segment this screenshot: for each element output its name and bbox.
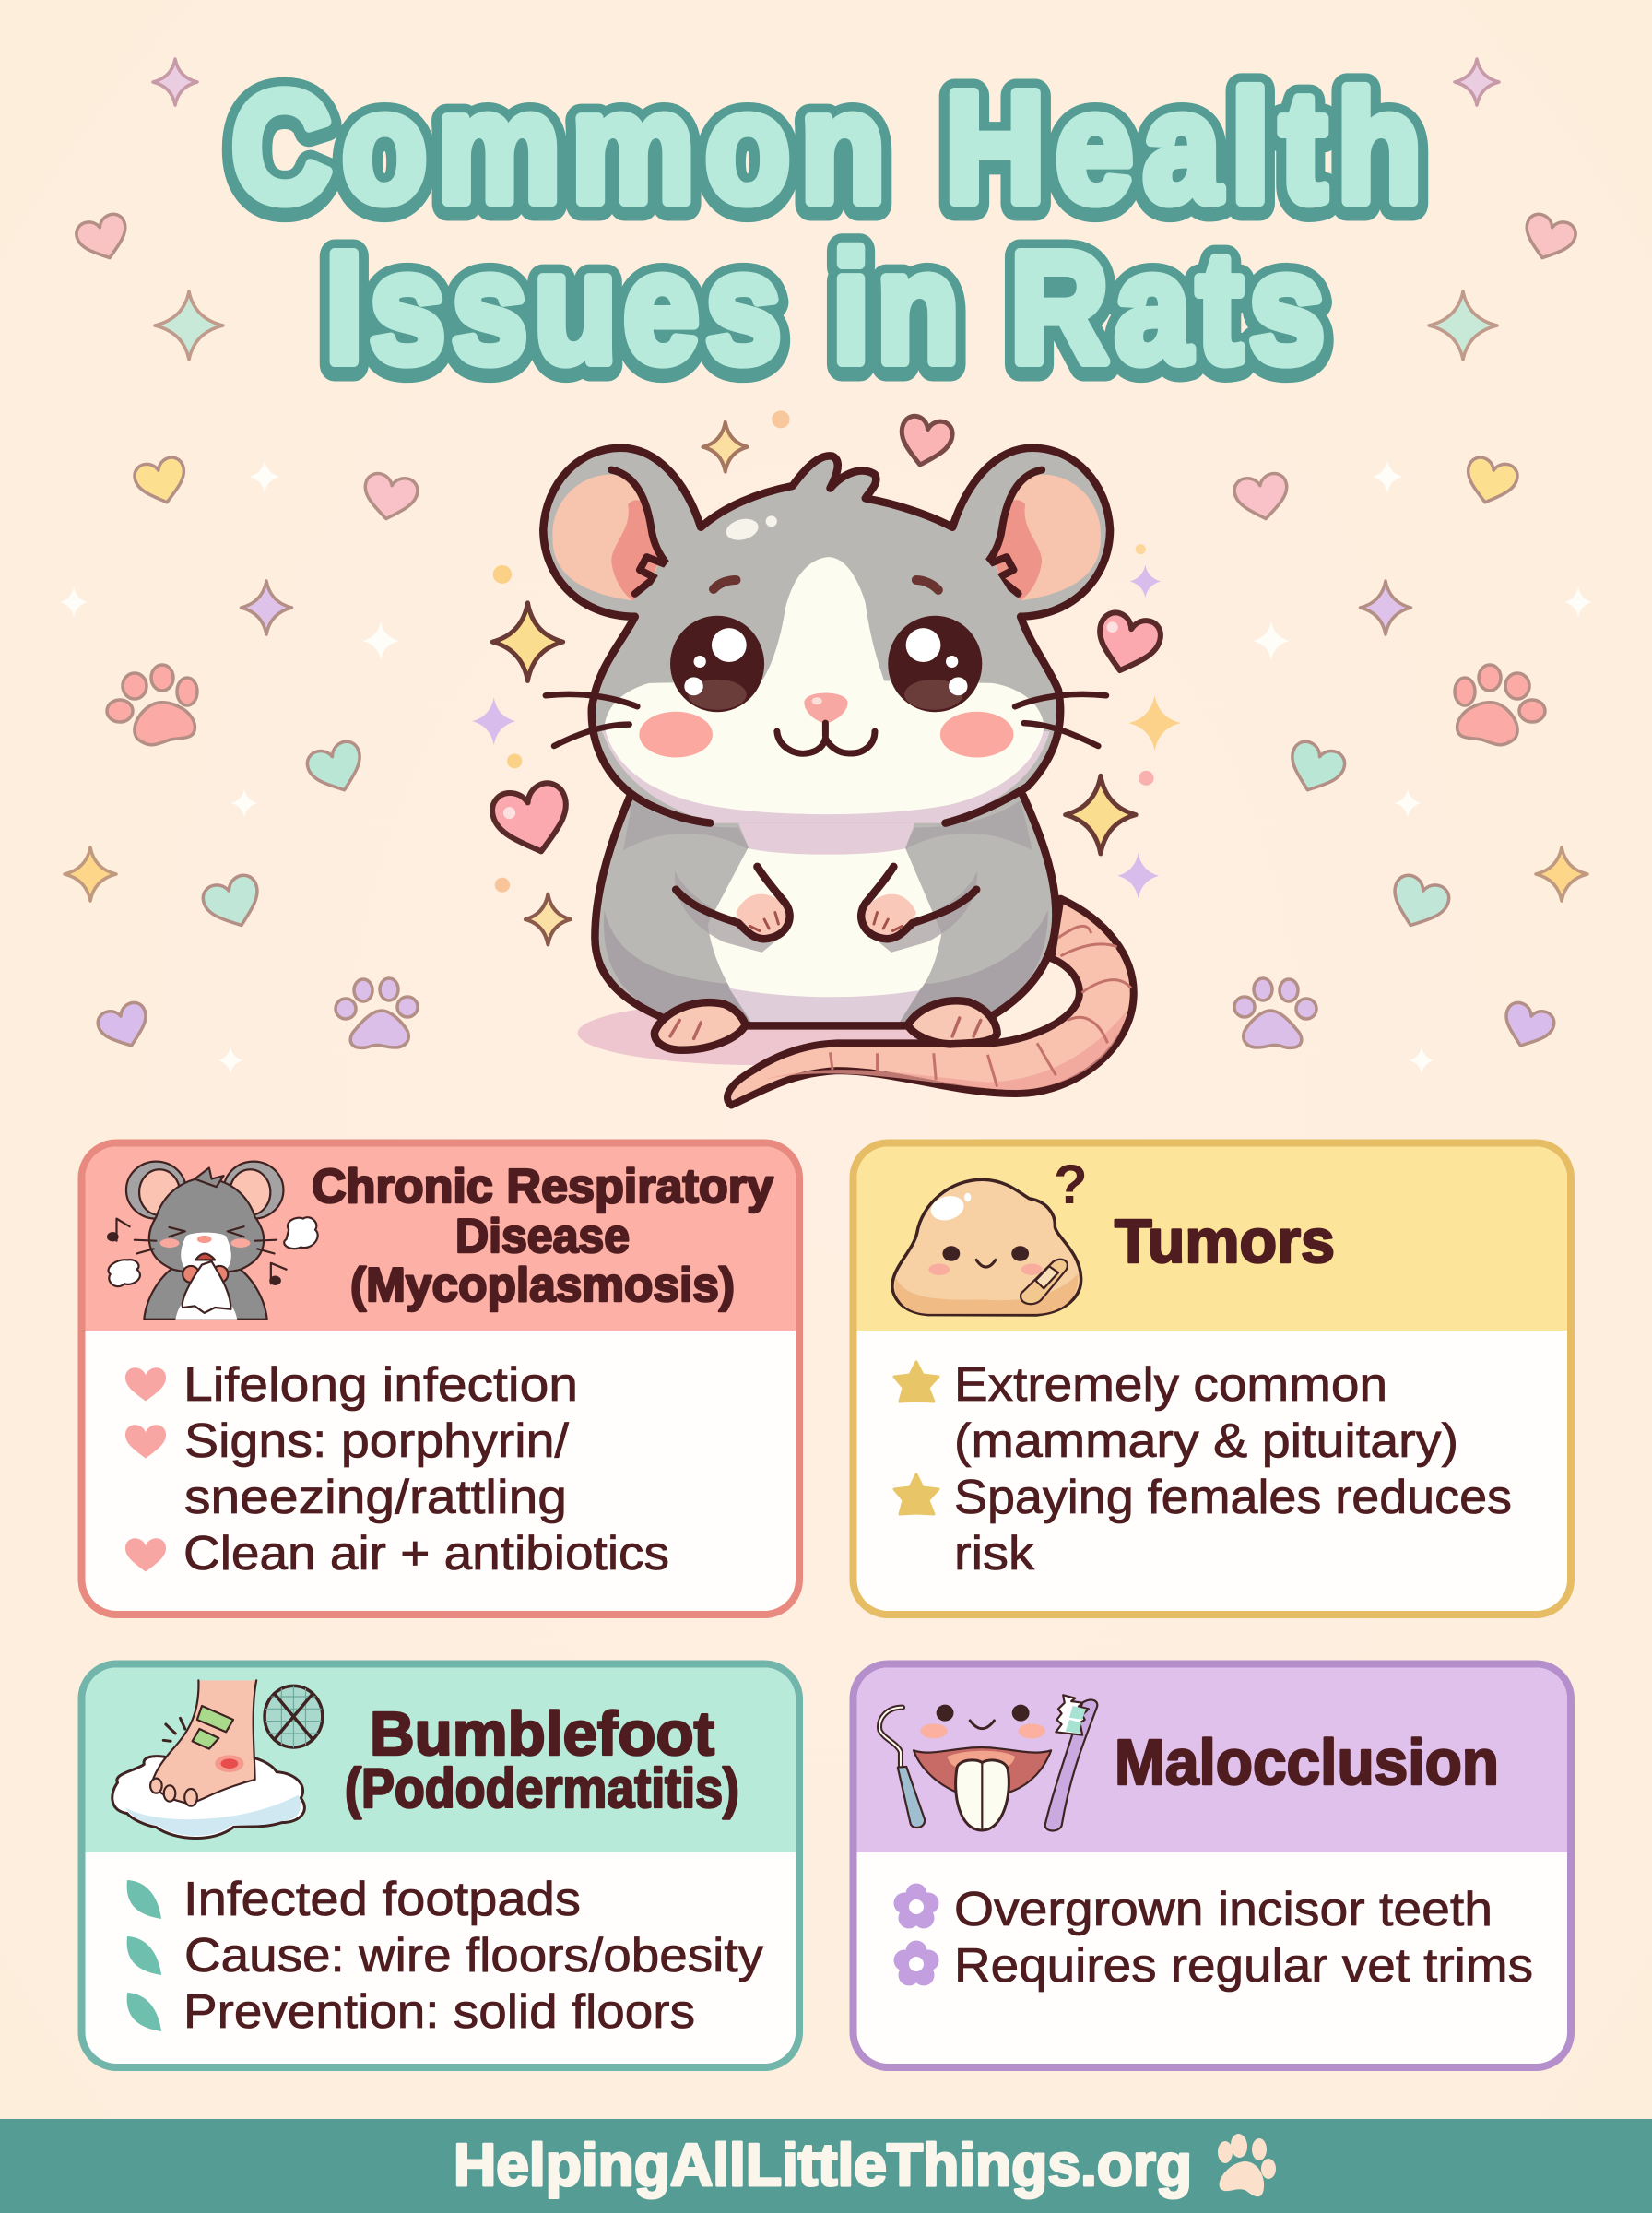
panel heading: Malocclusion — [1115, 1726, 1499, 1798]
bullet list: Spaying females reduces — [954, 1471, 1512, 1524]
bullet list — [894, 1883, 1533, 1993]
bullet list: Cause: wire floors/obesity — [184, 1929, 763, 1982]
tail — [727, 899, 1134, 1105]
bullet list: Signs: porphyrin/ — [184, 1414, 570, 1468]
right ear — [952, 448, 1110, 617]
illustration: rat mascot — [472, 410, 1181, 1105]
panel heading — [312, 1160, 773, 1312]
panel: tumors — [850, 1140, 1575, 1618]
icon: paw — [1218, 2133, 1276, 2196]
body — [595, 796, 1056, 1024]
brows — [714, 580, 938, 590]
panel heading: Chronic Respiratory — [312, 1160, 773, 1213]
panel heading: Bumblefoot — [370, 1699, 714, 1769]
sparkles, hearts and dots around rat — [472, 410, 1181, 944]
icon: overgrown teeth with dental tools — [879, 1695, 1097, 1830]
white face mask — [605, 557, 1044, 814]
title: Common Health — [231, 60, 1422, 235]
bullet list: Infected footpads — [183, 1873, 581, 1926]
icon: sore foot on soft cloud with crossed-out wire mesh — [112, 1680, 323, 1839]
ground shadow — [578, 1001, 947, 1065]
bullet list: (mammary & pituitary) — [954, 1414, 1458, 1468]
panel heading — [345, 1699, 739, 1819]
bullet list: Extremely common — [954, 1358, 1387, 1412]
bullet list: risk — [954, 1527, 1035, 1580]
whiskers — [546, 694, 1106, 746]
bullet list: sneezing/rattling — [184, 1471, 567, 1524]
decorative hearts, sparkles and paws: left — [60, 59, 419, 1074]
icon: sneezing rat — [108, 1162, 318, 1320]
panel: malocclusion — [850, 1660, 1575, 2071]
feet — [655, 1000, 997, 1050]
panel header — [85, 1667, 796, 1852]
title: Issues in Rats — [325, 219, 1325, 395]
bullet list: Lifelong infection — [183, 1358, 578, 1412]
bullet list — [127, 1873, 763, 2039]
bullet list: Clean air + antibiotics — [183, 1527, 669, 1580]
panel heading: Tumors — [1115, 1207, 1335, 1276]
decorative hearts, sparkles and paws: right — [1233, 59, 1592, 1074]
bullet list: Overgrown incisor teeth — [954, 1883, 1493, 1936]
icon: smiling lump with bandage — [892, 1179, 1081, 1315]
panel header — [857, 1667, 1567, 1852]
icon: question mark: ? — [1054, 1154, 1088, 1215]
nose and mouth — [777, 692, 875, 753]
footer — [0, 2119, 1652, 2213]
panel heading: (Pododermatitis) — [345, 1757, 739, 1819]
bullet list — [894, 1358, 1512, 1580]
title — [231, 60, 1422, 397]
footer website: HelpingAllLittleThings.org — [454, 2131, 1192, 2198]
bullet list: Requires regular vet trims — [954, 1939, 1533, 1993]
left ear — [543, 448, 701, 617]
head — [592, 456, 1060, 823]
eyes — [670, 616, 982, 712]
panel heading: (Mycoplasmosis) — [350, 1259, 735, 1312]
arms and paws — [675, 867, 977, 953]
belly — [708, 848, 941, 998]
panel header — [85, 1147, 796, 1331]
panel: bumblefoot — [77, 1660, 803, 2071]
panel heading: Disease — [455, 1210, 630, 1263]
cheeks — [639, 712, 1013, 757]
bullet list: Prevention: solid floors — [183, 1985, 695, 2039]
panel: chronic respiratory disease — [77, 1140, 803, 1618]
panel header — [857, 1147, 1567, 1331]
bullet list — [125, 1358, 669, 1580]
